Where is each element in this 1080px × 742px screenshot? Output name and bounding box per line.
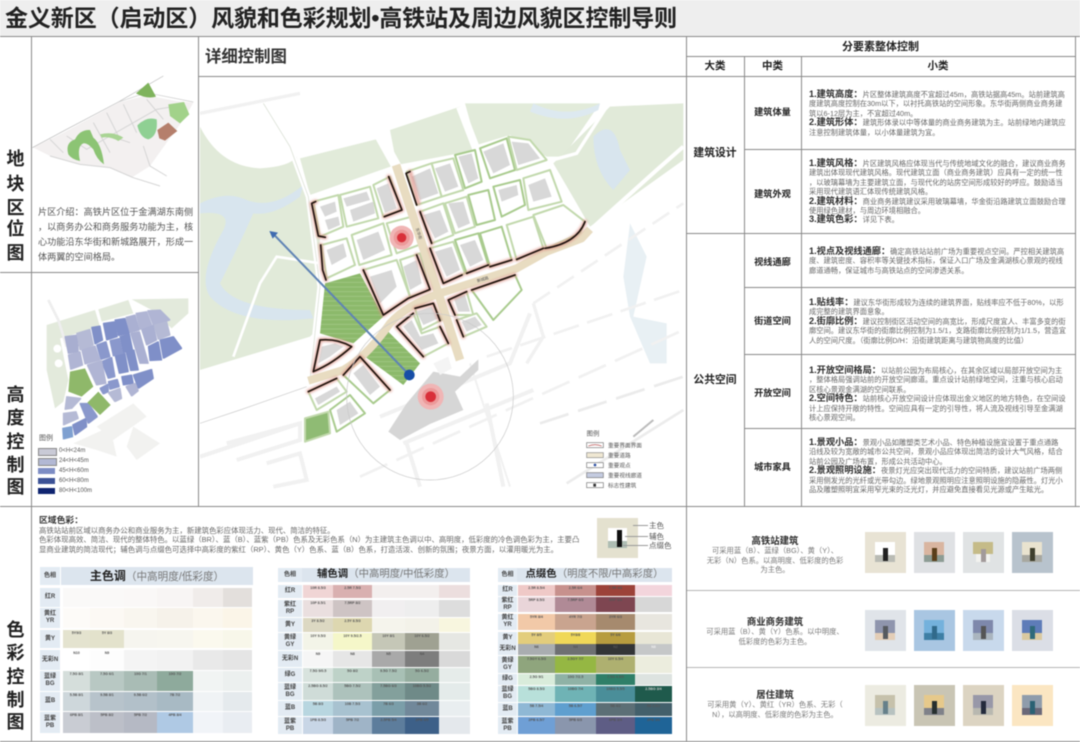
table: element-wise control <box>686 37 1076 506</box>
building footprints <box>315 142 552 425</box>
text: building appearance <box>808 157 1066 224</box>
colour table: secondary tone: 9.5G 7.5/2 <box>380 669 397 673</box>
section label: colour control: 控 <box>6 667 24 687</box>
text: railway station buildings: 无彩（N）色系。以高明度、低彩度的色彩 <box>707 556 843 564</box>
colour table: accent colour: 4YR 7/3 <box>569 615 582 619</box>
colour table: accent colour: 10BG 7/4 <box>568 687 583 691</box>
colour table: accent colour: 黄Y <box>502 634 512 640</box>
text: urban furniture: 沿线及较为宽敞的城市公共空间，景观小品应体现出简洁的设计大气风格，结合 <box>809 447 1063 456</box>
colour table: secondary tone: 10Y 8/1 <box>382 634 395 638</box>
swatch: commercial 1 <box>865 610 906 651</box>
colour table: secondary tone: 5G 6.5/2 <box>415 669 429 673</box>
legend: building height: 80<H<100m <box>59 488 92 494</box>
colour table: accent colour: 蓝紫 <box>501 718 514 724</box>
high-speed rail station <box>388 359 478 440</box>
section label: height control: 高 <box>6 385 24 405</box>
text: building appearance: 1.建筑风格：片区建筑风格应体现当代与传统地域文化的融合，建议商业商务 <box>809 158 1066 168</box>
green park <box>320 273 383 343</box>
text: building appearance: 使用绿色建材，与周边环境相融合。 <box>809 206 925 215</box>
legend: building height: 0<H<24m <box>59 448 85 454</box>
colour table: accent colour: 10BG 5.5/5 <box>606 687 625 691</box>
colour table: accent colour: N8 <box>651 645 656 649</box>
text: open space: 1.开放空间格局：以站前公园为布局核心，在其余区域以局部开放空间为主 <box>809 365 1062 375</box>
section label: height control <box>6 384 25 497</box>
swatch: commercial 4 <box>1012 610 1053 651</box>
colour table: main tone: 红R <box>45 594 55 600</box>
title banner <box>0 0 1080 37</box>
colour table: accent colour: 5B 7.5/4 <box>530 704 543 708</box>
text: railway station buildings: 可采用蓝（B）、蓝绿（BG）、黄（Y）、 <box>712 546 838 555</box>
legend: building height: 45<H<60m <box>59 468 89 474</box>
colour table: main tone: 蓝绿 <box>44 674 56 680</box>
text: building appearance: 建筑出体现现代建筑风格。现代建筑立面（商业商务建筑）应具有一定的统一性 <box>809 168 1063 177</box>
section label: colour control: 制 <box>6 690 24 710</box>
colour table: secondary tone: 10BG 5.5/2 <box>413 684 431 688</box>
colour table: accent colour <box>498 567 673 735</box>
text: urban furniture <box>808 436 1064 494</box>
swatch: commercial 3 <box>963 610 1004 651</box>
swatch: residential 1 <box>865 685 906 726</box>
text: commercial buildings: 商业商务建筑 <box>747 616 803 627</box>
colour table: secondary tone: 2PB 4/5 <box>416 718 428 722</box>
colour table: main tone: 7.5G 8/1 <box>70 672 83 676</box>
colour table: main tone: N10 <box>73 651 80 655</box>
colour table: accent colour: 3YR 6/3 <box>609 615 622 619</box>
text: street space <box>808 296 1066 345</box>
section label: height control: 控 <box>6 432 24 452</box>
colour table: secondary tone: 7.5RP 8/2 <box>345 601 360 605</box>
text block: area introduction: 心功能沿东华街和新城路展开，形成一 <box>38 237 193 247</box>
text: urban furniture: 采用侧发光的光纤或光带勾边。绿地景观照明应注意照明设施的隐蔽性。灯光小 <box>809 476 1063 485</box>
text: residential buildings <box>707 688 843 719</box>
colour table: accent colour: N4 <box>573 645 578 649</box>
text: building appearance: 采用现代建筑语汇体现传统建筑风格。 <box>809 187 932 196</box>
table: element-wise control: 开放空间 <box>754 388 791 398</box>
text: urban furniture: 1.景观小品：景观小品如雕塑类艺术小品、特色种植设施宜设置于重点通路 <box>809 437 1058 447</box>
colour table: accent colour: 红R <box>502 587 513 593</box>
colour table: main tone: N9 <box>105 651 109 655</box>
section label: colour control <box>6 620 25 732</box>
colour table: secondary tone: 黄Y <box>285 622 295 628</box>
text: building massing: 筑以6-12层为主，不宜超过40m。 <box>809 109 917 118</box>
text: street space: 成完整的建筑界面意象。 <box>809 307 889 316</box>
swatch: residential 3 <box>963 685 1004 726</box>
colour table: secondary tone: 10R 8.5/3 <box>310 586 326 590</box>
text: open space: 核心景观空间。 <box>809 413 860 422</box>
colour table: accent colour: 2PB 6.5/7 <box>528 718 544 722</box>
sight corridor arrow <box>269 231 415 380</box>
colour table: accent colour: 7.5RP 6/3 <box>568 598 583 602</box>
colour table: secondary tone: 2.5R 7.5/3 <box>344 586 361 590</box>
colour table: secondary tone <box>278 567 470 735</box>
table: element-wise control: 街道空间 <box>754 316 791 326</box>
colour table: main tone: 7.5G 6/1 <box>100 672 114 676</box>
colour table: secondary tone: 5G 8/2 <box>347 669 358 673</box>
swatch: station 2 <box>914 532 955 573</box>
title banner: 金义新区（启动区）风貌和色彩规划•高铁站及周边风貌区控制导则 <box>5 5 677 31</box>
legend: building height: 60<H<80m <box>59 478 89 484</box>
colour table: secondary tone: PB <box>286 726 294 732</box>
table: element-wise control: 小类 <box>928 60 948 72</box>
section label: location map: 图 <box>6 243 24 263</box>
colour key swatch: 主色 <box>649 521 664 530</box>
colour table: accent colour: N2 <box>613 645 618 649</box>
colour table: accent colour: 黄红 <box>501 615 514 621</box>
colour table: secondary tone: 2.5Y 8.5/3 <box>344 619 361 623</box>
colour table: secondary tone: 10B 7.5/3 <box>345 702 360 706</box>
colour table: main tone: 9.5B 6/2 <box>134 693 147 697</box>
text: street space: 1.贴线率：建议东华街形成较为连续的建筑界面，贴线率应不低于80%，以形 <box>809 297 1064 307</box>
road labels <box>415 227 489 283</box>
colour table: accent colour: PB <box>503 726 512 732</box>
colour key swatch: 点缀色 <box>649 541 672 550</box>
text: railway station buildings: 为主色。 <box>760 565 790 574</box>
colour table: accent colour: 点缀色（明度不限/中高彩度） <box>526 569 663 580</box>
section label: colour control: 彩 <box>6 643 24 663</box>
colour table: main tone: 5Y9/3 <box>72 631 81 635</box>
landmark point: station <box>418 384 444 410</box>
table: element-wise control: 建筑外观 <box>754 189 791 199</box>
map legend: 重要视线廊道 <box>608 471 642 479</box>
map legend: 重要道路 <box>608 451 631 459</box>
colour table: main tone: 色相 <box>44 572 56 578</box>
colour table: accent colour: 5B 3.5/2 <box>647 704 660 708</box>
colour table: main tone: 黄Y <box>45 636 55 642</box>
text block: area introduction: ，以商务办公和商务服务功能为主，核 <box>38 222 193 232</box>
table: element-wise control: 分要素整体控制 <box>842 41 919 53</box>
table: element-wise control: 视线通廊 <box>754 257 791 267</box>
colour table: accent colour: 2.5R 8.5/4 <box>528 586 545 590</box>
colour table: main tone: 10G 7/1 <box>134 672 147 676</box>
colour table: main tone <box>40 566 254 734</box>
text block: regional colour: 显商业建筑的简洁现代；辅色调与点缀色可选择中高彩度的紫红（RP）、黄色（Y）色系、蓝（B）色系，打造活泼、创新的氛围；夜景方面，以灌用暖光为主。 <box>39 545 558 554</box>
text: building massing: 度建筑高度控制在30m以下，以衬托高铁站的空间形象。东华街两侧商业商务建 <box>809 99 1062 108</box>
colour table: main tone: 无彩N <box>42 656 58 662</box>
station catchment circle <box>347 313 513 480</box>
text block: area introduction <box>38 206 194 262</box>
panel: height control map <box>46 298 189 460</box>
section label: height control: 制 <box>6 455 24 475</box>
panel: location map <box>32 76 194 187</box>
colour table: accent colour: 2PB 3/6 <box>647 718 660 722</box>
colour table: accent colour: 2.5G 9/1 <box>530 675 543 679</box>
table: element-wise control: 城市家具 <box>754 462 791 472</box>
section label: location map: 地 <box>6 149 24 169</box>
colour table: main tone: 9.5B 8/1 <box>100 693 114 697</box>
section label: location map: 块 <box>6 174 24 194</box>
text: open space: 2.空间特色：站前核心开放空间设计应体现出金义地区的地方特色，在空间设 <box>809 393 1066 403</box>
swatch: station 1 <box>865 532 906 573</box>
colour table: secondary tone: 红R <box>285 588 295 594</box>
colour table: accent colour: 7.5G 4.5/5 <box>607 675 624 679</box>
colour table: main tone: 5PB 8/2 <box>100 713 114 717</box>
colour table: accent colour: 蓝B <box>502 706 513 712</box>
text: open space: 计上应保持开敞的特性。空间应具有一定的引导性，将人流及视线引导至金满湖 <box>809 404 1063 413</box>
road labels: 新城路 <box>476 274 489 283</box>
section label: location map: 区 <box>6 198 24 218</box>
swatch: residential 2 <box>914 685 955 726</box>
text: open space: ，整体格局强调站前的开放空间廊道。重点设计站前绿地空间，注重与核心启动 <box>809 375 1063 384</box>
colour table: accent colour: 5Y8/8 <box>571 633 580 637</box>
colour table: secondary tone: GY <box>286 642 294 648</box>
map legend: 重要界面界面 <box>608 441 642 449</box>
colour table: secondary tone: N5 <box>386 652 391 656</box>
text block: regional colour <box>38 514 580 554</box>
text block: area introduction: 体两翼的空间格局。 <box>38 252 120 262</box>
colour table: secondary tone: 3B 6/2 <box>417 702 427 706</box>
land background <box>200 103 683 370</box>
colour table: accent colour: 色相 <box>501 572 514 578</box>
colour table: accent colour: 紫红 <box>501 598 514 604</box>
colour table: secondary tone: 7B 6/3 <box>383 702 394 706</box>
text: residential buildings: 可采用黄（Y）、黄红（YR）色系、无彩（ <box>707 700 843 709</box>
text block: regional colour: 色彩体现高效、简洁、现代的整体特色。以蓝绿（BR）、蓝（B）、蓝紫（PB）色系及无彩色系（N）为主建筑主色调以中、高明度，低彩度的冷色调色彩为主，主要凸 <box>39 535 579 544</box>
colour table: secondary tone: N9 <box>316 652 320 656</box>
text: building appearance: 3.建筑色彩：详见下表。 <box>809 214 899 224</box>
city blocks <box>305 137 585 442</box>
colour table: accent colour: 5B 4/2 <box>610 704 621 708</box>
colour table: accent colour: 5PB 6/3 <box>569 718 582 722</box>
landmark point: north <box>390 226 414 250</box>
colour table: secondary tone: 10Y 9.5/3 <box>310 634 326 638</box>
text: street space: 2.街廓比例：建议控制街区活动空间的高宽比，形成尺度宜人、丰富多变的街 <box>809 316 1066 326</box>
text: sight corridor: 度、建筑密度、容积率等关键技术指标，保证入口广场及金满湖核心景观的视线 <box>809 256 1063 265</box>
text: building massing: 1.建筑高度：片区整体建筑高度不宜超过45m，高铁站据高45m。站前建筑高 <box>809 89 1065 99</box>
swatch: station 3 <box>963 532 1004 573</box>
table: element-wise control: 建筑设计 <box>693 147 737 159</box>
colour table: main tone: BG <box>45 681 54 687</box>
colour table: accent colour: 黄绿 <box>501 658 514 664</box>
text: urban furniture: 站前公园及广场布置，形成公共活动中心。 <box>809 457 947 466</box>
section label: height control: 图 <box>6 477 24 497</box>
road labels: 东华街 <box>415 227 424 240</box>
text: street space: 廓空间。建议东华街的街廓比例控制为1.5/1，支路街廓比例控制为1/1.5，营造宜 <box>809 326 1066 335</box>
colour table: secondary tone: 10Y 6.5/2 <box>414 634 430 638</box>
text: urban furniture: 品及雕塑照明宜采用窄光束的泛光灯，并应避免直接看见光源或产生眩光。 <box>809 485 1048 494</box>
colour table: secondary tone: 蓝B <box>285 705 295 711</box>
colour table: secondary tone: 2.5BG 8.5/2 <box>308 684 328 688</box>
colour table: accent colour: YR <box>503 622 512 628</box>
map legend <box>587 428 642 489</box>
map legend: 标志性建筑 <box>608 481 637 489</box>
colour table: accent colour: 5BG 8.5/3 <box>528 687 545 691</box>
text: building massing: 注意控制建筑体量，以小体量建筑为宜。 <box>809 128 940 137</box>
text: residential buildings: 居住建筑 <box>756 689 794 700</box>
text: building massing <box>808 88 1066 137</box>
colour table: main tone: 4PB 8/4 <box>168 713 182 717</box>
colour table: accent colour: 10G 7/2.5 <box>568 675 583 679</box>
colour table: accent colour: 6PB 3/4 <box>609 718 622 722</box>
text: urban furniture: 2.景观照明设施：夜景灯光应突出现代活力的空间特质，建议站前广场两侧 <box>809 465 1062 475</box>
colour table: secondary tone: 2.5PB 5/4 <box>380 718 396 722</box>
swatch: commercial 2 <box>914 610 955 651</box>
text: sight corridor: 1.视点及视线通廊：确定高铁站站前广场为重要视点空间。严控相关建筑高 <box>809 246 1064 256</box>
text: commercial buildings: 低彩度的色彩为主色。 <box>739 636 811 646</box>
colour table: secondary tone: 5BG 7.5/2 <box>344 684 361 688</box>
key interface edges <box>308 172 585 392</box>
text: building appearance: ，以玻璃幕墙为主要建筑立面，与现代化的站房空间形成较好的呼应。鼓励适当 <box>809 178 1063 187</box>
colour table: secondary tone: N8 <box>350 652 355 656</box>
text: open space <box>808 364 1066 422</box>
colour table: main tone: 5PB 7/2 <box>134 713 147 717</box>
colour table: main tone: 5.5B 8/1 <box>70 693 83 697</box>
colour table: secondary tone: 5PB 7/2 <box>346 718 359 722</box>
legend: building height: 图例 <box>39 435 53 442</box>
section label: location map: 位 <box>6 219 24 239</box>
colour table: accent colour: 5Y 8/5 <box>531 633 542 637</box>
colour table: secondary tone: 5B 8/3 <box>313 702 323 706</box>
table: element-wise control: 中类 <box>762 60 783 72</box>
colour table: accent colour: 5Y 6/6 <box>610 633 621 637</box>
colour table: secondary tone: 1PB 8.5/3 <box>310 718 326 722</box>
text: commercial buildings: 可采用蓝（B）、黄（Y）色系。以中明度、 <box>706 627 844 636</box>
colour table: accent colour: 7.5GY 6.5/3 <box>527 657 546 661</box>
colour key swatch <box>596 518 672 558</box>
colour table: secondary tone: 辅色调（中高明度/中低彩度） <box>317 569 455 580</box>
colour table: main tone: 主色调（中高明度/低彩度） <box>90 569 224 583</box>
colour table: main tone: 蓝紫 <box>44 716 56 722</box>
section label: colour control: 色 <box>6 620 24 640</box>
text: street space: 人的空间尺度。（街廓比例D/H：沿街建筑距离与建筑物高度的比值） <box>809 336 1028 345</box>
colour table: main tone: 5Y 8/3 <box>102 631 112 635</box>
text: building massing: 2.建筑形体：建筑形体录以中等体量的商业商务建筑为主。站前绿地内建筑应 <box>809 117 1066 127</box>
colour table: secondary tone: 7.5BG 6/3 <box>380 684 397 688</box>
colour table: accent colour: RP <box>503 604 512 610</box>
colour table: main tone: 7B 7/2 <box>170 693 180 697</box>
colour table: accent colour: 5B 6.5/7 <box>569 704 582 708</box>
panel: detailed control map <box>200 92 684 489</box>
colour table: secondary tone: 10P 8.5/1 <box>310 601 326 605</box>
city road edge <box>263 103 320 380</box>
table: element-wise control: 建筑体量 <box>754 107 791 117</box>
colour table: secondary tone: 蓝紫 <box>284 718 296 724</box>
section label: colour control: 图 <box>6 712 24 732</box>
legend: building height: 24<H<45m <box>59 458 89 464</box>
text block: regional colour: 区域色彩： <box>39 515 83 525</box>
colour table: secondary tone: N4 <box>420 652 424 656</box>
legend: building height <box>37 434 92 495</box>
section label: height control: 度 <box>6 408 24 428</box>
colour table: secondary tone: 色相 <box>284 572 296 578</box>
text block: regional colour: 高铁站站前区域以商务办公和商业服务为主，新建筑色彩应体现活力、现代、简洁的特征。 <box>39 526 335 535</box>
colour table: accent colour: BG <box>503 694 512 700</box>
colour table: accent colour: 2.5BG 3/4 <box>645 687 662 691</box>
colour table: accent colour: GY <box>503 664 512 670</box>
key roads <box>308 165 590 381</box>
colour table: main tone: 10G 7/2 <box>169 672 181 676</box>
colour table: main tone: YR <box>46 618 54 624</box>
colour table: accent colour: 5RP 8.5/3 <box>529 598 544 602</box>
colour table: accent colour: 无彩N <box>499 646 516 652</box>
colour table: secondary tone: RP <box>286 608 294 614</box>
swatch: station 4 <box>1012 532 1053 573</box>
text: sight corridor <box>808 245 1064 275</box>
colour table: secondary tone: 10Y 9.5/2.5 <box>343 634 362 638</box>
text: open space: 区核心景观金满湖的空间联系。 <box>809 385 911 394</box>
colour table: secondary tone: 3Y 8.5/2 <box>311 619 325 623</box>
map legend: 图例 <box>587 428 599 437</box>
colour table: main tone: 黄红 <box>44 611 56 617</box>
faint context roads <box>200 93 683 487</box>
text: residential buildings: N），以高明度、低彩度的色彩为主色。 <box>712 710 838 718</box>
colour table: secondary tone: 蓝绿 <box>284 684 296 690</box>
colour table: secondary tone: 无彩N <box>282 656 298 662</box>
colour table: accent colour: 10Y 6.5/4 <box>608 657 623 661</box>
table: element-wise control: 大类 <box>704 60 726 72</box>
text block: area introduction: 片区介绍：高铁片区位于金满湖东南侧 <box>38 207 193 217</box>
colour table: accent colour: 绿G <box>502 676 513 682</box>
colour table: accent colour: 2.5R 6/4 <box>569 586 582 590</box>
colour table: main tone: 6PB 8/1 <box>70 713 83 717</box>
colour table: accent colour: 5RP 3/4 <box>609 598 622 602</box>
text: commercial buildings <box>706 616 844 646</box>
swatch: residential 4 <box>1012 685 1053 726</box>
colour table: accent colour: 7.5R 4/6 <box>609 586 622 590</box>
text: building appearance: 2.建筑材料：商业商务建筑建议采用玻璃幕墙，华金街沿路建筑立面鼓励合理 <box>809 196 1066 206</box>
table: element-wise control: 公共空间 <box>693 374 737 386</box>
map legend: 重要观点 <box>608 461 631 469</box>
colour table: secondary tone: 黄绿 <box>284 634 296 640</box>
colour table: secondary tone: 紫红 <box>284 602 296 608</box>
colour key swatch: 辅色 <box>649 532 664 541</box>
text: sight corridor: 廊道通畅，保证城市与高铁站点的空间渗透关系。 <box>809 266 969 275</box>
colour table: secondary tone: 绿G <box>285 672 295 678</box>
text: railway station buildings <box>706 534 844 574</box>
colour table: secondary tone: 7.5G 9/0.5 <box>310 669 326 673</box>
colour table: secondary tone: BG <box>285 692 294 698</box>
colour table: accent colour: 5YR 8/4 <box>530 615 543 619</box>
colour table: accent colour: 2.5GY 7/7 <box>567 657 584 661</box>
colour table: main tone: PB <box>46 722 54 728</box>
colour table: main tone: 蓝B <box>45 698 55 704</box>
colour table: accent colour: 蓝绿 <box>501 687 514 693</box>
colour table: accent colour: N6 <box>534 645 539 649</box>
text: railway station buildings: 高铁站建筑 <box>752 535 798 546</box>
section label: location map <box>6 148 25 263</box>
heading: detailed control map: 详细控制图 <box>205 48 287 66</box>
